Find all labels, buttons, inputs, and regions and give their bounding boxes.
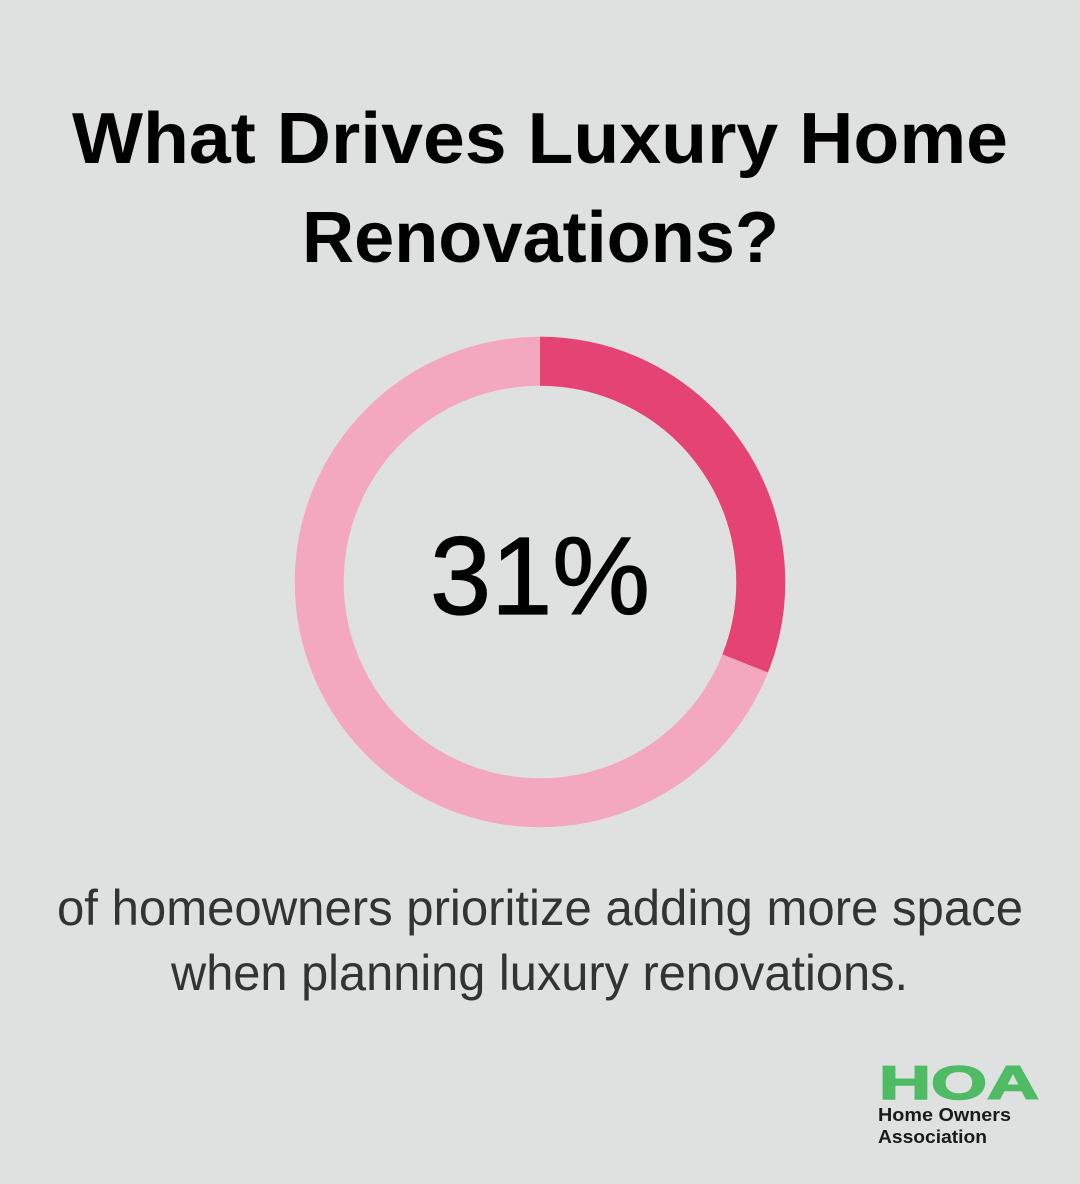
description text (57, 880, 1023, 1001)
donut chart: 31% (319, 361, 761, 803)
big percentage: 31% (430, 515, 650, 638)
donut track (319, 361, 761, 803)
logo: HOA Home Owners Association: HOA (879, 1056, 1039, 1109)
title: What Drives Luxury Home (72, 99, 1008, 179)
logo: HOA Home Owners Association (878, 1056, 1039, 1147)
description text: when planning luxury renovations. (170, 945, 908, 1001)
donut highlighted segment (540, 361, 761, 663)
title (72, 99, 1008, 278)
title: Renovations? (302, 198, 779, 278)
logo: HOA Home Owners Association: Association (878, 1126, 987, 1147)
description text: of homeowners prioritize adding more space (57, 880, 1023, 936)
logo: HOA Home Owners Association: Home Owners (878, 1104, 1011, 1125)
